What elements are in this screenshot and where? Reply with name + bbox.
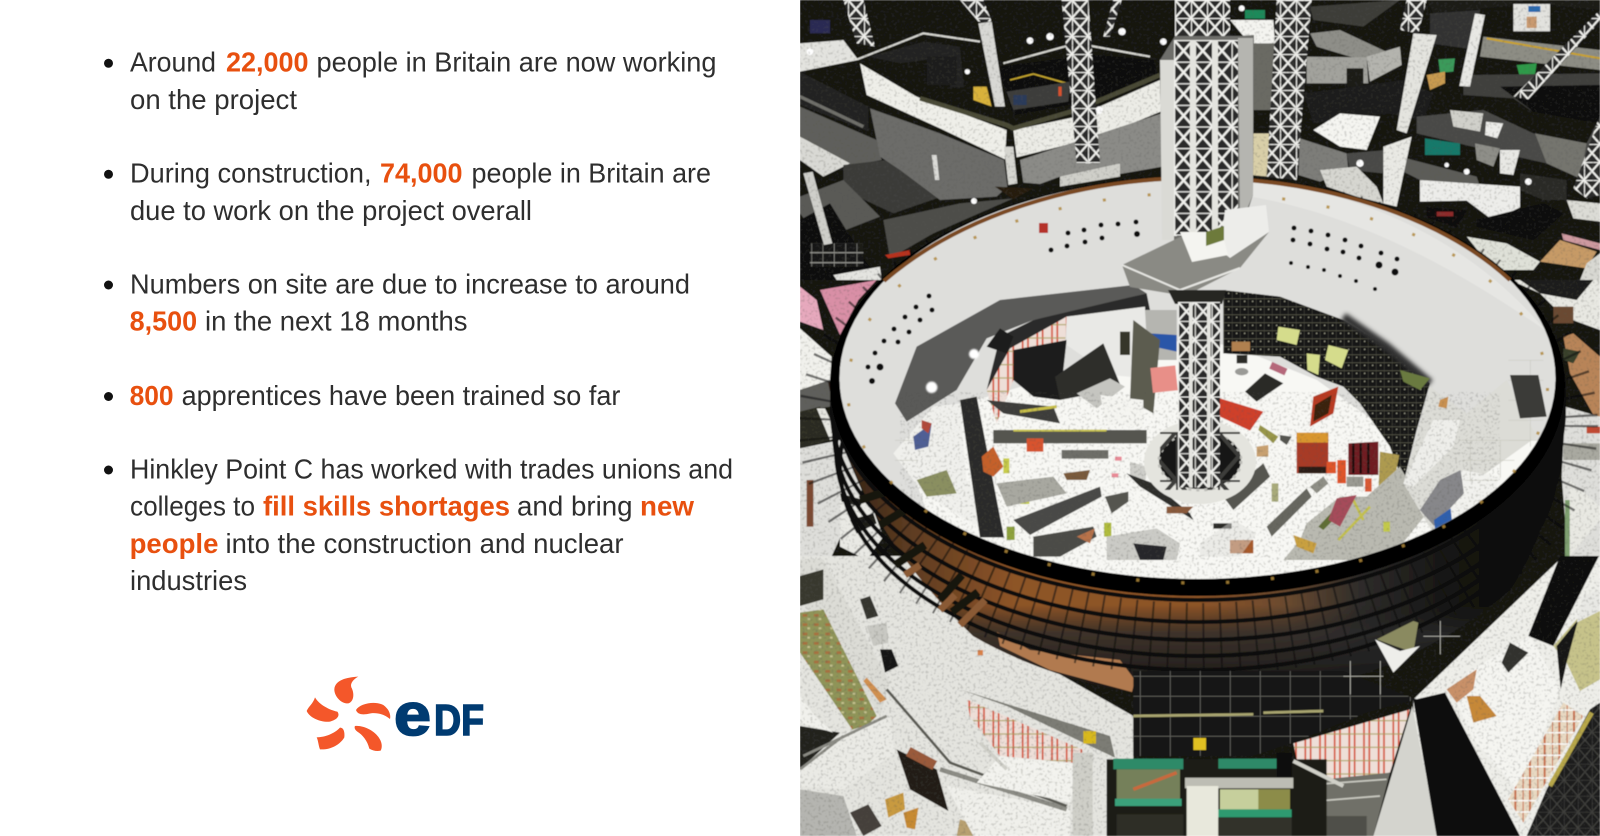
photo: Hinkley Point C reactor building construction site bbox=[800, 0, 1600, 836]
EDF logo bbox=[307, 677, 484, 751]
bullet: trades unions and colleges: people bbox=[130, 528, 218, 559]
dots in the wall bbox=[866, 220, 1400, 384]
floor, left half bbox=[893, 307, 1193, 560]
site, lower ring and base bbox=[800, 556, 1600, 836]
bullet: 8,500 on site: Numbers on site are due to increase to around bbox=[130, 268, 690, 299]
bullet: 800 apprentices: 800 bbox=[130, 380, 174, 411]
bullet: 22,000 people working now: on the project bbox=[130, 84, 297, 115]
bullet: trades unions and colleges: fill skills shortages bbox=[263, 491, 510, 522]
white background panel bbox=[0, 0, 800, 836]
floor texture bbox=[900, 392, 1500, 588]
reactor pit bbox=[1144, 420, 1256, 504]
bullet: 22,000 people working now: 22,000 bbox=[226, 47, 308, 78]
central crane tower and platform bbox=[1122, 0, 1269, 488]
bullet: 74,000 people overall: due to work on the project overall bbox=[130, 195, 532, 226]
grey lower wall, left bbox=[895, 285, 1150, 422]
white floor bbox=[918, 341, 1538, 580]
rim: brown top edge and studs bbox=[848, 178, 1548, 583]
bullet: 8,500 on site: in the next 18 months bbox=[205, 306, 468, 336]
bullet: trades unions and colleges: Hinkley Point C has worked with trades unions and bbox=[130, 454, 733, 484]
bullet: 74,000 people overall bbox=[104, 158, 711, 226]
EDF wordmark: DF bbox=[434, 696, 484, 745]
tan sheets on lower left bbox=[997, 632, 1135, 692]
bullet: 74,000 people overall: During construction, bbox=[130, 158, 372, 189]
bullet: trades unions and colleges bbox=[104, 454, 733, 596]
bullet: 22,000 people working now: Around bbox=[130, 47, 216, 78]
bullet: 22,000 people working now bbox=[104, 47, 716, 115]
protruding brackets bbox=[860, 490, 978, 612]
site, left and right of the ring bbox=[800, 280, 1600, 560]
bullet: 22,000 people working now: people in Britain are now working bbox=[316, 47, 716, 78]
bullet: trades unions and colleges: new bbox=[640, 491, 695, 522]
bullet: 800 apprentices: apprentices have been trained so far bbox=[182, 380, 620, 411]
reactor interior bbox=[893, 285, 1550, 600]
night-time site background bbox=[800, 0, 1600, 836]
bullet: trades unions and colleges: into the construction and nuclear bbox=[226, 528, 624, 559]
bullet: 74,000 people overall: 74,000 bbox=[380, 158, 462, 189]
bullet: 8,500 on site bbox=[104, 268, 690, 336]
bullet: trades unions and colleges: and bring bbox=[517, 491, 633, 522]
green scaffold access tower bbox=[1107, 738, 1343, 836]
bullet: 8,500 on site: 8,500 bbox=[130, 306, 197, 336]
inner wall of reactor ring bbox=[840, 177, 1556, 579]
bullet: trades unions and colleges: industries bbox=[130, 565, 247, 596]
EDF wordmark: e bbox=[394, 682, 431, 748]
icon: EDF orange flower bbox=[307, 677, 390, 751]
workers and plant bbox=[982, 447, 1003, 477]
site, upper left block bbox=[800, 0, 1167, 280]
speckle texture over site bbox=[800, 0, 1600, 836]
EDF wordmark bbox=[394, 682, 484, 748]
site, upper right bbox=[1230, 0, 1600, 280]
pink formwork bbox=[987, 317, 1067, 423]
bullet: 74,000 people overall: people in Britain are bbox=[472, 158, 711, 189]
dark concrete pyramid bbox=[1373, 693, 1520, 836]
reactor cylinder outer cladding bbox=[828, 184, 1566, 700]
rebar wall and floor, right half bbox=[1200, 290, 1547, 560]
bullet: trades unions and colleges: colleges to bbox=[130, 491, 255, 522]
scaffold and dark lower structure bbox=[1133, 621, 1460, 836]
ring rim outer edge bbox=[830, 176, 1565, 596]
bullet list bbox=[104, 47, 733, 596]
dark pillar bbox=[960, 397, 1004, 537]
